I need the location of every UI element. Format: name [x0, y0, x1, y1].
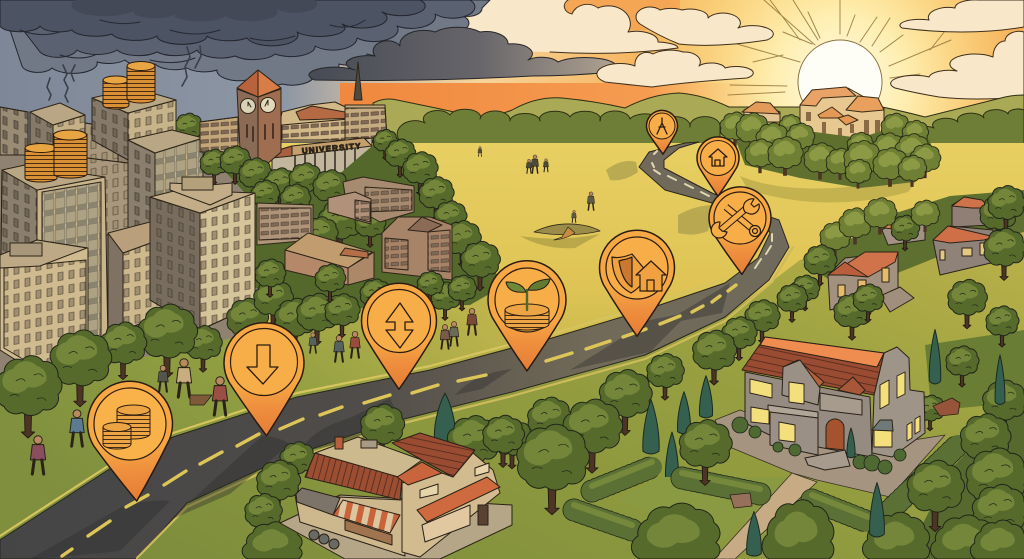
- grass north of the road: [0, 280, 512, 540]
- backing block behind city towers: [0, 140, 260, 388]
- storm clouds top left: [0, 0, 490, 86]
- university campus: [272, 62, 387, 178]
- restaurant shop: [280, 433, 512, 559]
- icon: lightning bolts: [47, 46, 201, 102]
- main towers: [0, 165, 255, 372]
- people on the path: [30, 308, 477, 474]
- pin 4: sprout on coins: [488, 261, 566, 371]
- sunlit meadow: [0, 143, 1024, 403]
- dark cloud centre: [309, 27, 617, 80]
- pin 8: small figure icon: [646, 110, 678, 155]
- pin 7: house: [697, 137, 739, 196]
- right side trees behind large house: [528, 186, 1024, 482]
- roadside trees north of road: [0, 259, 477, 438]
- garden crates: [730, 398, 960, 508]
- hills: [373, 93, 1024, 160]
- tree behind skyline: [174, 113, 203, 149]
- house front shrubs: [732, 417, 906, 474]
- pin 5: shield and house: [600, 230, 674, 336]
- sun with rays: [728, 0, 960, 124]
- tree cluster around the manor: [720, 112, 941, 189]
- pin 1: coins: [84, 378, 179, 505]
- pin 3: up and down arrows: [362, 283, 436, 389]
- far manor on the hill with sun behind: [742, 87, 884, 142]
- pin 6: wrench and screwdriver: [708, 186, 773, 275]
- grass south of the road: [137, 190, 1024, 559]
- near trees: [242, 393, 1024, 559]
- road: [0, 142, 793, 559]
- far buildings left skyline: [0, 88, 238, 235]
- University sign: UNIVERSITY: [301, 141, 362, 156]
- campus blocks in the trees: [257, 177, 452, 285]
- clock tower: [237, 70, 281, 172]
- distant houses on the right: [828, 197, 995, 312]
- forest undergrowth on the right: [810, 190, 1024, 559]
- pin 2: down arrow: [223, 321, 307, 437]
- campus tree belt: [200, 129, 505, 310]
- sunlit clouds: [468, 0, 1024, 99]
- driveway and walkway: [714, 410, 945, 559]
- sky background: [0, 0, 1024, 272]
- sunlit cloud in front of dark cloud: [597, 50, 753, 87]
- meadow shadows and small figures: [478, 146, 920, 248]
- coin stacks on rooftops: [25, 62, 155, 182]
- garden lawn: [619, 477, 792, 543]
- hedges in the garden: [574, 445, 958, 530]
- large house: [742, 337, 925, 470]
